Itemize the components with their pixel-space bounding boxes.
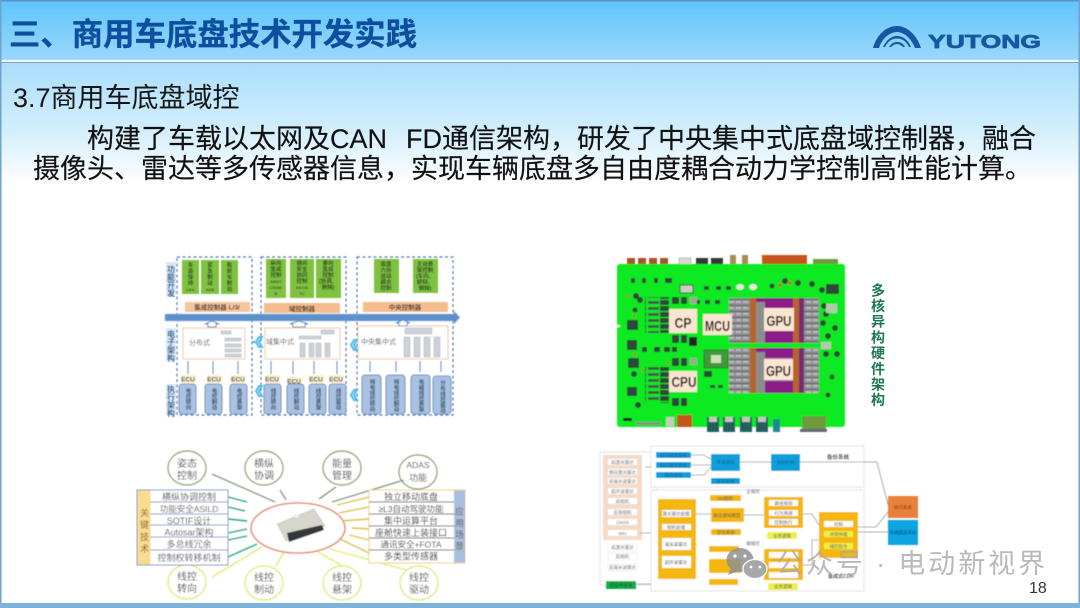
main system panel: 路径规划 — [774, 500, 793, 507]
electronic architecture panels — [183, 326, 448, 359]
watermark: wechat official account — [726, 548, 1045, 579]
chip labels: CP — [674, 315, 692, 332]
side labels: 功能开发 — [166, 264, 176, 298]
green box text: B — [275, 291, 278, 296]
green box text: (车内、 — [416, 272, 434, 280]
circle labels: 线控 — [332, 571, 352, 584]
sensor panel: 后激光雷达 — [611, 544, 634, 551]
backup system panel: 定位系统 — [716, 478, 735, 485]
timeline arrow — [165, 311, 460, 324]
sensor panel: 前激光雷达 — [611, 459, 634, 466]
ECU labels: ECU — [287, 378, 301, 386]
top connectors — [627, 255, 838, 277]
green box text: (协调、 — [319, 277, 337, 285]
actuator text: 分布线控驱动 — [439, 379, 446, 414]
green box text: 集成 — [270, 265, 282, 273]
diagram: architecture evolution — [165, 257, 460, 418]
sensor panel: 后视相机 — [614, 509, 632, 516]
green box text: 底盘 — [380, 260, 392, 268]
green box text: 车 — [227, 273, 233, 281]
application scenario table: 座舱快速上装接口 — [375, 527, 447, 538]
body text: 构建了车载以太网及CAN — [87, 124, 387, 154]
main system panel: 定位系统 — [717, 529, 735, 536]
main system panel: 360相机 — [717, 495, 734, 502]
chip labels: CPU — [672, 374, 696, 391]
green box text: 控制 — [322, 271, 334, 279]
up arrows and connectors — [188, 320, 441, 400]
backup system panel: 前向雷达感知 — [660, 462, 687, 469]
ECU labels: ECU — [181, 376, 195, 384]
green function boxes — [182, 259, 438, 298]
actuator text: 电控转向 — [184, 387, 191, 410]
diagram: system block chart — [600, 446, 918, 591]
actuator text: 线控悬架 — [314, 387, 321, 411]
application scenario table: 多类型传感器 — [384, 550, 438, 562]
board components — [617, 278, 840, 408]
main system panel: 主域控 — [746, 488, 760, 495]
ECU labels: ECU — [309, 376, 323, 384]
key technology table: SOTIF设计 — [167, 515, 211, 526]
actuator text: 电磁线控悬架 — [418, 378, 424, 413]
circle labels: ADAS — [406, 460, 430, 470]
icon: logo arcs — [873, 26, 921, 48]
electronic architecture panels: 域集中式 — [266, 337, 294, 346]
backup system panel: 备份系统 — [827, 453, 849, 461]
green box text: 侧倾) — [419, 284, 432, 292]
controller bars — [185, 302, 448, 313]
green box text: 控制 — [296, 277, 308, 285]
actuator text: 电控制动 — [210, 387, 217, 411]
green box text: 保 — [188, 273, 194, 281]
green box text: 纵向 — [270, 259, 282, 267]
green box text: ABS/T — [270, 279, 283, 284]
backup system panel: 前向视觉感知 — [660, 452, 687, 459]
slide background — [0, 62, 1080, 185]
circle labels: 横纵 — [254, 457, 274, 470]
body text: 摄像头、雷达等多传感器信息，实现车辆底盘多自由度耦合动力学控制高性能计算。 — [33, 154, 1032, 184]
main system panel: 行为预测 — [774, 510, 793, 517]
logo wordmark: YUTONG — [928, 32, 1041, 52]
main system panel: 辅域控 — [746, 540, 760, 547]
circle labels — [177, 457, 430, 596]
diagram: domain controller functions — [137, 451, 465, 600]
application scenario table: 通讯安全+FOTA — [380, 540, 442, 550]
circle labels: 线控 — [254, 571, 274, 584]
sensor panel — [600, 452, 657, 589]
green box text: 运动 — [380, 272, 392, 280]
green box text: 垂向 — [322, 259, 334, 267]
green box text: CS/AE — [270, 285, 282, 290]
bottom connectors — [623, 415, 827, 432]
key technology table: Autosar架构 — [164, 526, 214, 538]
actuator text: 线控驱动 — [334, 387, 341, 411]
small chip — [704, 350, 728, 368]
green box text: 制 — [227, 279, 233, 287]
side labels: 电子架构 — [166, 329, 176, 363]
green box text: 六向 — [380, 266, 392, 274]
main system panel: 集成式CDH — [828, 573, 854, 580]
electronic architecture panels: 分布式 — [189, 338, 210, 347]
electronic architecture panels: 中央集中式 — [361, 337, 396, 346]
green box text: 俯仰、 — [417, 278, 433, 286]
ECU labels: ECU — [265, 376, 279, 384]
key technology table: 关键技术 — [139, 507, 149, 556]
green box text — [186, 259, 434, 296]
ECU labels: ECU — [207, 376, 221, 384]
actuator boxes — [179, 375, 451, 414]
circle labels: 制动 — [254, 583, 274, 596]
icon: wechat bubbles — [726, 548, 767, 578]
sensor panel: 侧向激光雷达 — [609, 469, 636, 476]
main system panel — [651, 488, 864, 591]
green box text: 协同 — [296, 271, 308, 279]
application scenario table: 独立移动底盘 — [384, 491, 438, 502]
header band — [0, 0, 1080, 63]
main system panel: 冲突仲裁 — [830, 531, 848, 538]
main system panel: 激光雷达处理 — [662, 510, 690, 518]
circle labels: 驱动 — [409, 584, 429, 596]
key technology table: 控制权转移机制 — [157, 552, 221, 563]
green box text: 道 — [188, 267, 194, 275]
key technology table: 多总线冗余 — [166, 538, 212, 550]
actuator text: 纯电线控制动 — [392, 378, 399, 413]
title: 三、商用车底盘技术开发实践 — [9, 17, 417, 52]
body text — [33, 124, 1036, 184]
sensor panel: GNSS — [616, 520, 629, 525]
main system panel: 域控指令 — [830, 543, 848, 550]
main system panel: 融合感知模型 — [714, 512, 741, 519]
center controller — [251, 503, 345, 553]
gpu module top — [729, 298, 819, 343]
board body — [617, 264, 845, 427]
logo: Yutong — [873, 26, 1041, 52]
sensor panel: 后毫米波雷达 — [609, 564, 636, 571]
green box text: 控制 — [270, 271, 282, 279]
application scenario table: ≥L3自动驾驶功能 — [378, 504, 444, 514]
output blocks: 车辆底盘系统 — [890, 529, 917, 536]
green box text: 轨 — [227, 261, 233, 269]
circle labels: 能量 — [332, 457, 352, 470]
circle labels: 线控 — [177, 570, 197, 583]
chip labels: GPU — [766, 313, 792, 330]
circle labels: 姿态 — [177, 457, 197, 470]
dashed column frames — [177, 257, 453, 415]
ECU labels — [181, 375, 344, 386]
backup system panel: 规划控制 — [776, 459, 795, 466]
pcb board — [617, 255, 845, 432]
connector lines — [636, 455, 888, 584]
application scenario table: 应用场景 — [454, 506, 464, 553]
green box text: 动 — [227, 285, 233, 293]
green box text: YC — [299, 291, 305, 296]
actuator text — [184, 378, 446, 414]
circle labels: 功能 — [409, 472, 427, 483]
green box text: 控制 — [380, 284, 392, 292]
green box text: 耦合 — [380, 278, 392, 286]
green box text: 制 — [207, 273, 213, 281]
key technology table — [137, 490, 228, 565]
section heading: 3.7商用车底盘域控 — [13, 83, 240, 113]
side labels — [166, 262, 176, 418]
watermark text: 公众号 · 电动新视界 — [776, 549, 1045, 579]
circle labels: 转向 — [177, 582, 197, 595]
output blocks — [888, 496, 918, 545]
circle labels: 协调 — [254, 469, 274, 482]
green box text: 主动悬 — [417, 260, 434, 268]
body text: FD通信架构，研发了中央集中式底盘域控制器，融合 — [406, 124, 1036, 154]
controller bars: 域控制器 — [289, 304, 316, 313]
green box text: LKA — [186, 287, 195, 292]
main system panel: 控制 — [834, 521, 843, 528]
backup system panel — [651, 446, 864, 487]
green box text: 架控制 — [417, 266, 434, 274]
output blocks: 执行系统 — [894, 504, 912, 511]
chip labels — [669, 308, 794, 392]
green box text: 紧 — [207, 261, 213, 269]
key technology table: 功能安全ASILD — [160, 504, 218, 514]
green box text: 急 — [207, 267, 213, 275]
circle labels: 悬架 — [332, 584, 352, 596]
green box text: 安全 — [296, 265, 308, 273]
green box text: 动 — [207, 279, 213, 287]
circle labels: 线控 — [409, 571, 429, 584]
circle labels: 管理 — [332, 469, 352, 482]
spoke lines — [212, 474, 406, 577]
sensor panel: 前毫米波雷达 — [609, 478, 636, 485]
sensor panel: 底盘传感器 — [610, 582, 633, 589]
green box text: 矩 — [227, 267, 233, 275]
controller bars: 集成控制器 L/3/ — [194, 302, 240, 312]
circle labels: 控制 — [177, 469, 197, 482]
ECU labels: ECU — [329, 376, 343, 384]
green box text: AEB — [206, 287, 214, 292]
sensor panel: 超声波雷达 — [611, 488, 634, 495]
green box text: ESC/D — [296, 285, 308, 290]
controller bars: 中央控制器 — [389, 302, 422, 312]
main system panel: 毫米波雷达 — [665, 541, 688, 548]
side labels: 执行架构 — [166, 384, 176, 418]
main system panel: 业务逻辑 — [773, 532, 791, 540]
sensor panel: 后相机 — [616, 553, 630, 560]
backup system panel: 侧向感知 — [664, 472, 683, 479]
ECU labels: ECU — [231, 376, 245, 384]
gpu module bottom — [729, 348, 819, 393]
green box text: 横向 — [296, 259, 308, 267]
main system panel: 控制执行 — [774, 519, 793, 526]
green box text: 车 — [188, 261, 194, 269]
actuator text: 电控悬架 — [236, 387, 242, 411]
main system panel: 超声波雷达 — [665, 559, 688, 566]
main system panel: 业务逻辑 — [774, 583, 792, 590]
key technology table: 横纵协调控制 — [162, 491, 216, 502]
sensor panel: 前相机 — [616, 498, 630, 505]
chip labels: MCU — [705, 318, 730, 335]
page number: 18 — [1029, 580, 1047, 597]
green box text: 集成 — [322, 265, 334, 273]
vertical label: multi-core heterogeneous hardware: 多核异构硬件架构 — [870, 282, 886, 409]
chip labels: GPU — [766, 363, 791, 380]
function circles — [168, 451, 438, 600]
actuator text: 纯电线控转向 — [368, 378, 375, 412]
sensor panel: IMU — [618, 531, 627, 536]
backup system panel: 环境感知 — [716, 459, 735, 466]
application scenario table: 集中运算平台 — [384, 515, 438, 526]
green box text: 侧倾) — [322, 283, 335, 291]
actuator text: 线控转向 — [270, 387, 276, 410]
main system panel: 相机处理 — [667, 524, 685, 531]
application scenario table — [369, 490, 465, 563]
actuator text: 线控制动 — [292, 387, 299, 411]
green box text: 持 — [188, 279, 194, 287]
